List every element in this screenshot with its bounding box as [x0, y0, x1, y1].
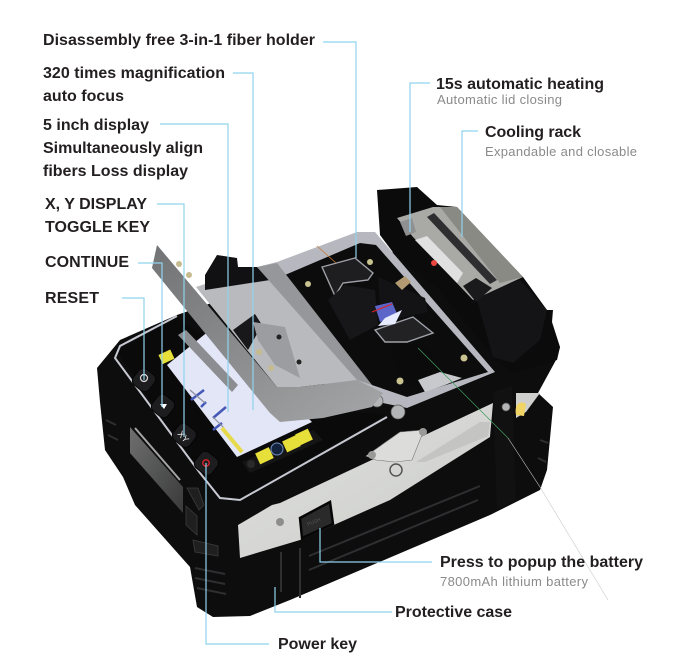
label: cooling rack: Expandable and closable — [485, 144, 637, 159]
label: cooling rack: Cooling rack — [485, 124, 581, 141]
screen bezel — [117, 318, 386, 498]
display screen — [167, 330, 312, 457]
top plate black recess — [285, 243, 488, 397]
label: magnification: auto focus — [43, 88, 124, 105]
label: battery: Press to popup the battery — [440, 554, 643, 571]
label: protective case: Protective case — [395, 604, 512, 621]
lid front face — [152, 245, 383, 422]
corner pillar and yellow sticker — [493, 386, 516, 510]
heater translucent lid — [397, 207, 523, 300]
keypad buttons — [130, 366, 221, 478]
label: power key: Power key — [278, 636, 357, 653]
leader: display — [160, 124, 228, 412]
lid mirror mount — [176, 261, 302, 378]
release latch — [366, 422, 490, 476]
label: fiber holder: Disassembly free 3-in-1 fiber holder — [43, 32, 315, 49]
bezel outline — [115, 316, 387, 500]
label: display — [43, 117, 203, 180]
fusion splicer device — [97, 187, 608, 617]
heater rack end — [475, 280, 547, 363]
heater latch — [400, 218, 416, 236]
label: display: Simultaneously align — [43, 140, 203, 157]
display readout marks — [190, 390, 242, 452]
fiber strand — [418, 348, 508, 438]
label: heating: 15s automatic heating — [436, 76, 604, 93]
XY button — [170, 421, 199, 450]
heater indicator LED — [431, 260, 437, 266]
leader: continue — [138, 263, 162, 407]
protective case body — [97, 250, 560, 617]
leader: magnification — [233, 73, 253, 410]
keypad buttons: XY — [176, 429, 191, 444]
leader: fiber holder — [323, 42, 356, 258]
label: display: 5 inch display — [43, 117, 149, 134]
label: XY key: X, Y DISPLAY — [45, 196, 147, 213]
orange fiber — [317, 246, 336, 263]
PUSH battery button — [300, 502, 333, 538]
display toolbar — [242, 429, 323, 473]
label: XY key — [45, 196, 150, 236]
label: XY key: TOGGLE KEY — [45, 219, 150, 236]
leader: power key — [206, 463, 269, 644]
fiber clamps — [305, 258, 468, 392]
lid support rod — [178, 330, 238, 392]
PUSH battery button: PUSH — [307, 517, 322, 528]
label: continue: CONTINUE — [45, 254, 129, 271]
top plate grey frame — [257, 232, 495, 408]
label: battery — [440, 554, 643, 589]
label: battery: 7800mAh lithium battery — [440, 574, 588, 589]
label: heating: Automatic lid closing — [437, 92, 562, 107]
leader: heating — [410, 83, 430, 232]
label: display: fibers Loss display — [43, 163, 188, 180]
battery side panel — [238, 403, 493, 558]
top-left screen icon — [158, 350, 174, 364]
side port details — [186, 488, 218, 556]
power button — [192, 449, 221, 478]
label: cooling rack — [485, 124, 637, 159]
leader: XY key — [157, 204, 184, 437]
lid back frame — [205, 255, 270, 290]
leader: battery — [320, 528, 432, 562]
label: reset: RESET — [45, 290, 99, 307]
hinge screws — [371, 395, 510, 419]
leader: cooling rack — [462, 131, 478, 237]
continue button — [149, 392, 177, 420]
label: magnification: 320 times magnification — [43, 65, 225, 82]
leader: protective case — [275, 587, 392, 612]
label: heating — [436, 76, 604, 107]
case grip ribs — [106, 420, 548, 598]
left side panel — [130, 427, 183, 513]
leader: reset — [122, 298, 144, 380]
heater body — [377, 187, 560, 373]
reset button — [130, 366, 158, 394]
hinged lid interior — [196, 267, 357, 387]
label: magnification — [43, 65, 225, 105]
